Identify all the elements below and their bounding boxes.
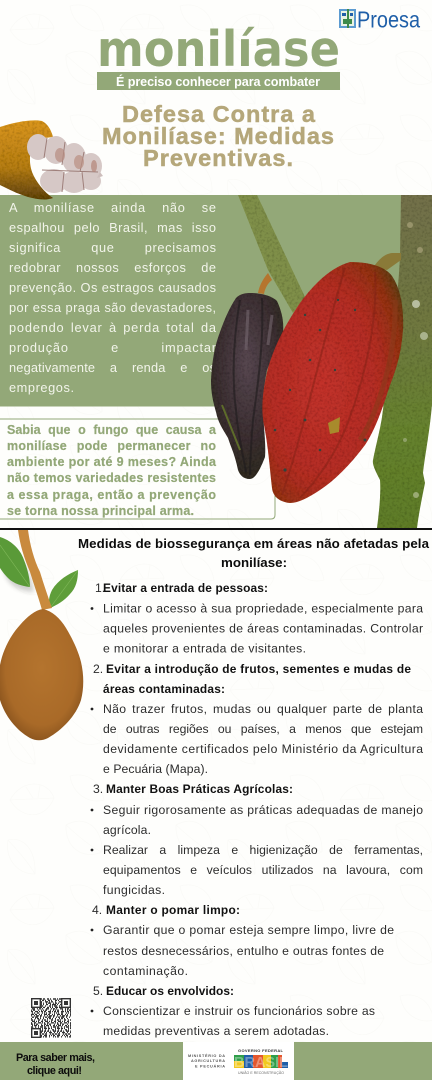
item 5: Educar os envolvidos: bbox=[106, 984, 234, 998]
heading: Defesa Contra a Monilíase: Monilíase: Medidas bbox=[102, 123, 334, 149]
item 1: aqueles provenientes de áreas contaminadas. Controlar bbox=[103, 622, 423, 636]
government logo: UNIÃO E RECONSTRUÇÃO bbox=[238, 1070, 284, 1075]
heading: Defesa Contra a Monilíase: Preventivas. bbox=[143, 145, 293, 171]
item 5: medidas preventivas a serem adotadas. bbox=[103, 1024, 329, 1038]
item 4: 4. bbox=[92, 903, 102, 917]
dark cocoa pod bbox=[211, 293, 283, 479]
image: cocoa tree with pods bbox=[211, 195, 432, 528]
intro text: significa que precisamos bbox=[9, 240, 216, 255]
item 3: fungicidas. bbox=[103, 883, 165, 897]
heading: biossegurança: Medidas de biossegurança em áreas não afetadas pela bbox=[78, 536, 430, 551]
heading: biossegurança bbox=[78, 536, 430, 570]
callout: Sabia que: ambiente por até 9 meses? Ainda bbox=[7, 455, 217, 469]
intro text: A monilíase ainda não se bbox=[9, 200, 216, 215]
item 3 bbox=[91, 782, 423, 897]
intro text: empregos. bbox=[9, 380, 74, 395]
item 2: Evitar a introdução de frutos, sementes e mudas de bbox=[106, 662, 411, 676]
government logo bbox=[234, 1048, 288, 1075]
footer logos panel bbox=[183, 1042, 294, 1080]
item 1: Limitar o acesso à sua propriedade, especialmente para bbox=[103, 602, 423, 616]
item 2: 2. bbox=[93, 662, 103, 676]
subtitle bar: É preciso conhecer para combater bbox=[116, 74, 320, 89]
intro text: produção e impactar bbox=[9, 340, 217, 355]
item 3: 3. bbox=[93, 782, 103, 796]
intro text bbox=[9, 200, 217, 395]
image: brown fruit with leaves bbox=[0, 530, 83, 740]
green band bbox=[0, 195, 432, 406]
item 2: e Pecuária (Mapa). bbox=[103, 762, 208, 776]
item 5: Conscientizar e instruir os funcionários sobre as bbox=[103, 1004, 375, 1018]
heading: biossegurança: monilíase: bbox=[221, 555, 287, 570]
item 4: Manter o pomar limpo: bbox=[106, 903, 240, 917]
red cocoa pod bbox=[262, 262, 403, 503]
heading: Defesa Contra a Monilíase bbox=[102, 101, 334, 171]
item 3: Manter Boas Práticas Agrícolas: bbox=[106, 782, 293, 796]
callout: Sabia que: não temos variedades resistentes bbox=[7, 471, 216, 485]
intro text: negativamente a renda e os bbox=[9, 360, 216, 375]
footer bar bbox=[0, 1042, 432, 1080]
callout: Sabia que: Sabia que o fungo que causa a bbox=[7, 423, 217, 437]
item 3: agrícola. bbox=[103, 823, 151, 837]
QR code bbox=[31, 999, 71, 1037]
title: monilíase: monilíase bbox=[97, 21, 340, 78]
intro text: podendo levar à perda total da bbox=[9, 320, 217, 335]
list: biosecurity measures bbox=[91, 581, 423, 1038]
item 2: Não trazer frutos, mudas ou qualquer parte de planta bbox=[103, 702, 423, 716]
item 2: de outras regiões ou países, a menos que estejam bbox=[103, 722, 423, 736]
item 3: Seguir rigorosamente as práticas adequadas de manejo bbox=[103, 803, 423, 817]
government logo: GOVERNO FEDERAL bbox=[238, 1048, 284, 1053]
item 1: e monitorar a entrada de visitantes. bbox=[103, 642, 306, 656]
callout: Sabia que: monilíase pode permanecer no bbox=[7, 439, 216, 453]
government logo: BRASIL bbox=[234, 1054, 288, 1071]
item 3: Realizar a limpeza e higienização de ferramentas, bbox=[103, 843, 423, 857]
item 4: contaminação. bbox=[103, 964, 188, 978]
item 2 bbox=[91, 662, 423, 776]
callout: Sabia que: a essa praga, então a prevenção bbox=[7, 488, 216, 502]
callout: Sabia que bbox=[0, 419, 275, 519]
item 4 bbox=[91, 903, 394, 978]
item 1: 1. bbox=[95, 581, 105, 595]
logo: Proesa bbox=[339, 6, 420, 32]
subtitle bar bbox=[97, 72, 340, 90]
footer link text: clique aqui! bbox=[27, 1065, 82, 1077]
item 1 bbox=[91, 581, 423, 656]
intro text: prevenção. Os estragos causados bbox=[9, 280, 216, 295]
ministry logo text: E PECUÁRIA bbox=[195, 1064, 225, 1068]
item 1: Evitar a entrada de pessoas: bbox=[103, 581, 268, 595]
item 4: Garantir que o pomar esteja sempre limpo, livre de bbox=[103, 923, 394, 937]
item 4: restos desnecessários, entulho e outras fontes de bbox=[103, 944, 384, 958]
footer link text bbox=[16, 1052, 95, 1077]
item 2: áreas contaminadas: bbox=[103, 682, 225, 696]
logo: Proesa: Proesa bbox=[357, 6, 420, 32]
intro text: redobrar nossos esforços de bbox=[9, 260, 216, 275]
image: open cocoa pod bbox=[0, 120, 103, 200]
ministry logo text bbox=[188, 1053, 225, 1068]
footer link text: Para saber mais, bbox=[16, 1052, 95, 1064]
item 3: equipamentos e veículos utilizados na lavoura, com bbox=[103, 863, 423, 877]
ministry logo text: MINISTÉRIO DA bbox=[188, 1053, 225, 1058]
callout: Sabia que: se torna nossa principal arma. bbox=[7, 504, 194, 518]
intro text: por essa praga são devastadores, bbox=[9, 300, 216, 315]
item 5: 5. bbox=[93, 984, 103, 998]
ministry logo text: AGRICULTURA bbox=[191, 1059, 225, 1063]
item 5 bbox=[91, 984, 375, 1038]
intro text: espalhou pelo Brasil, mas isso bbox=[9, 220, 216, 235]
heading: Defesa Contra a Monilíase: Defesa Contra a bbox=[122, 101, 316, 127]
item 2: devidamente certificados pelo Ministério da Agricultura bbox=[103, 742, 423, 756]
divider line bbox=[0, 528, 432, 530]
